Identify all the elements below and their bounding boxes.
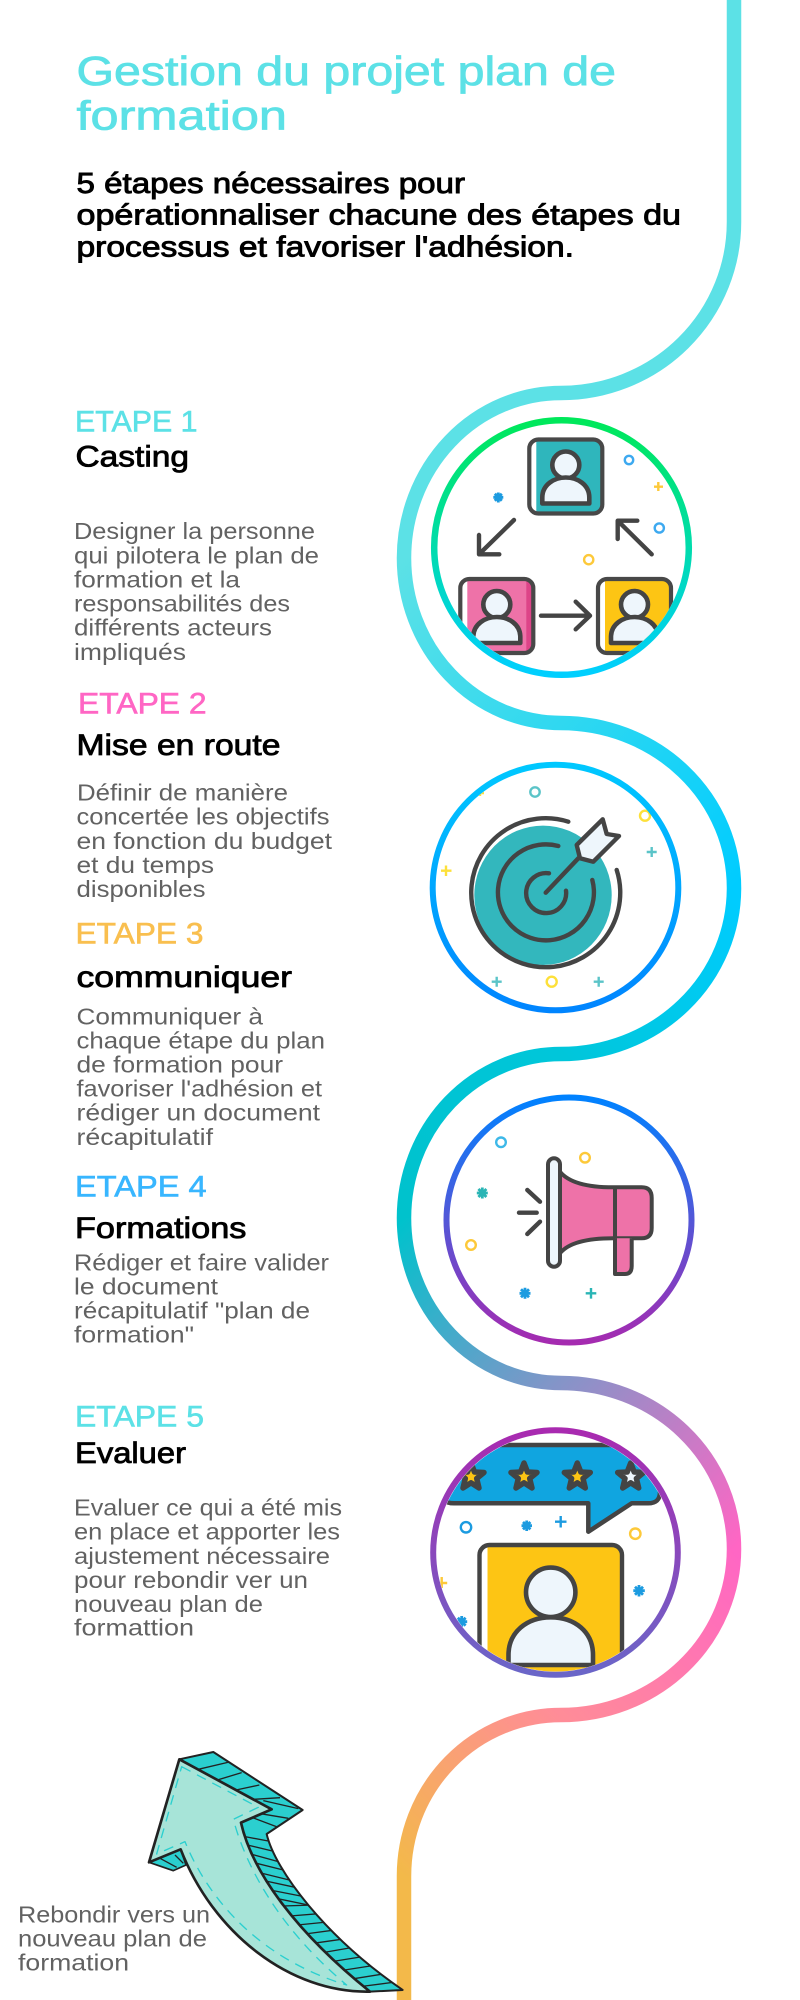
subtitle: [76, 168, 681, 264]
step 4 description: récapitulatif "plan de: [74, 1298, 310, 1324]
winding timeline path: [404, 0, 734, 2000]
step 3 description: favoriser l'adhésion et: [76, 1076, 323, 1102]
step 4 heading: Formations: [75, 1212, 246, 1245]
caption: bounce to new plan: formation: [18, 1950, 129, 1976]
step 5 description: pour rebondir ver un: [74, 1567, 308, 1593]
step 3 description: de formation pour: [76, 1052, 283, 1078]
title: Gestion du projet plan de: [76, 48, 616, 94]
panel: step 2 text: [76, 688, 333, 902]
step 5 description: en place et apporter les: [74, 1519, 340, 1545]
caption: bounce to new plan: Rebondir vers un: [18, 1901, 210, 1927]
icon: casting roles cycle: [434, 420, 689, 675]
step 5 description: formattion: [74, 1615, 194, 1641]
step 1 label: ETAPE 1: [75, 406, 198, 439]
icon: megaphone: [446, 1098, 692, 1342]
icon: target with arrow: [433, 765, 678, 1010]
step 2 description: en fonction du budget: [76, 828, 333, 854]
step 2 description: Définir de manière: [77, 780, 288, 806]
step 4 description: Rédiger et faire valider: [74, 1249, 329, 1275]
step 2 description: concertée les objectifs: [76, 804, 330, 830]
step 1 description: Designer la personne: [74, 518, 315, 544]
step 5 description: [74, 1495, 342, 1641]
step 1 description: formation et la: [74, 566, 240, 592]
step 1 description: impliqués: [74, 639, 186, 665]
step 1 description: [74, 518, 319, 665]
step 4 description: le document: [74, 1273, 219, 1299]
step 5 description: ajustement nécessaire: [74, 1543, 330, 1569]
step 1 description: qui pilotera le plan de: [74, 542, 319, 568]
step 1 heading: Casting: [76, 440, 189, 474]
step 5 description: Evaluer ce qui a été mis: [74, 1495, 342, 1521]
step 4 description: [74, 1249, 329, 1348]
step 3 description: Communiquer à: [76, 1003, 263, 1029]
subtitle: opérationnaliser chacune des étapes du: [76, 200, 681, 232]
step 3 heading: communiquer: [76, 961, 292, 994]
step 2 description: [76, 780, 333, 902]
subtitle: processus et favoriser l'adhésion.: [76, 232, 574, 264]
step 5 label: ETAPE 5: [75, 1400, 204, 1433]
title: [76, 48, 616, 138]
step 2 description: disponibles: [76, 876, 206, 902]
caption: bounce to new plan: [18, 1901, 210, 1976]
arrow: looping back to a new plan: [149, 1752, 403, 1992]
caption: bounce to new plan: nouveau plan de: [18, 1925, 207, 1951]
step 4 label: ETAPE 4: [75, 1171, 207, 1204]
step 1 description: différents acteurs: [74, 615, 272, 641]
step 2 heading: Mise en route: [76, 729, 280, 762]
step 5 description: nouveau plan de: [74, 1591, 263, 1617]
title: formation: [76, 92, 287, 138]
step 3 description: [76, 1003, 325, 1150]
step 2 description: et du temps: [76, 852, 214, 878]
step 3 description: rédiger un document: [76, 1100, 321, 1126]
icon: star review and person: [433, 1430, 678, 1695]
step 2 label: ETAPE 2: [78, 688, 207, 721]
panel: step 3 text: [76, 918, 325, 1150]
step 5 heading: Evaluer: [75, 1437, 186, 1470]
step 3 description: récapitulatif: [76, 1124, 214, 1150]
subtitle: 5 étapes nécessaires pour: [76, 168, 465, 200]
panel: step 1 text: [74, 406, 319, 665]
step 3 description: chaque étape du plan: [76, 1027, 325, 1053]
step 4 description: formation": [74, 1322, 194, 1348]
panel: step 5 text: [74, 1400, 342, 1641]
panel: step 4 text: [74, 1171, 329, 1348]
step 1 description: responsabilités des: [74, 591, 290, 617]
step 3 label: ETAPE 3: [76, 918, 204, 950]
